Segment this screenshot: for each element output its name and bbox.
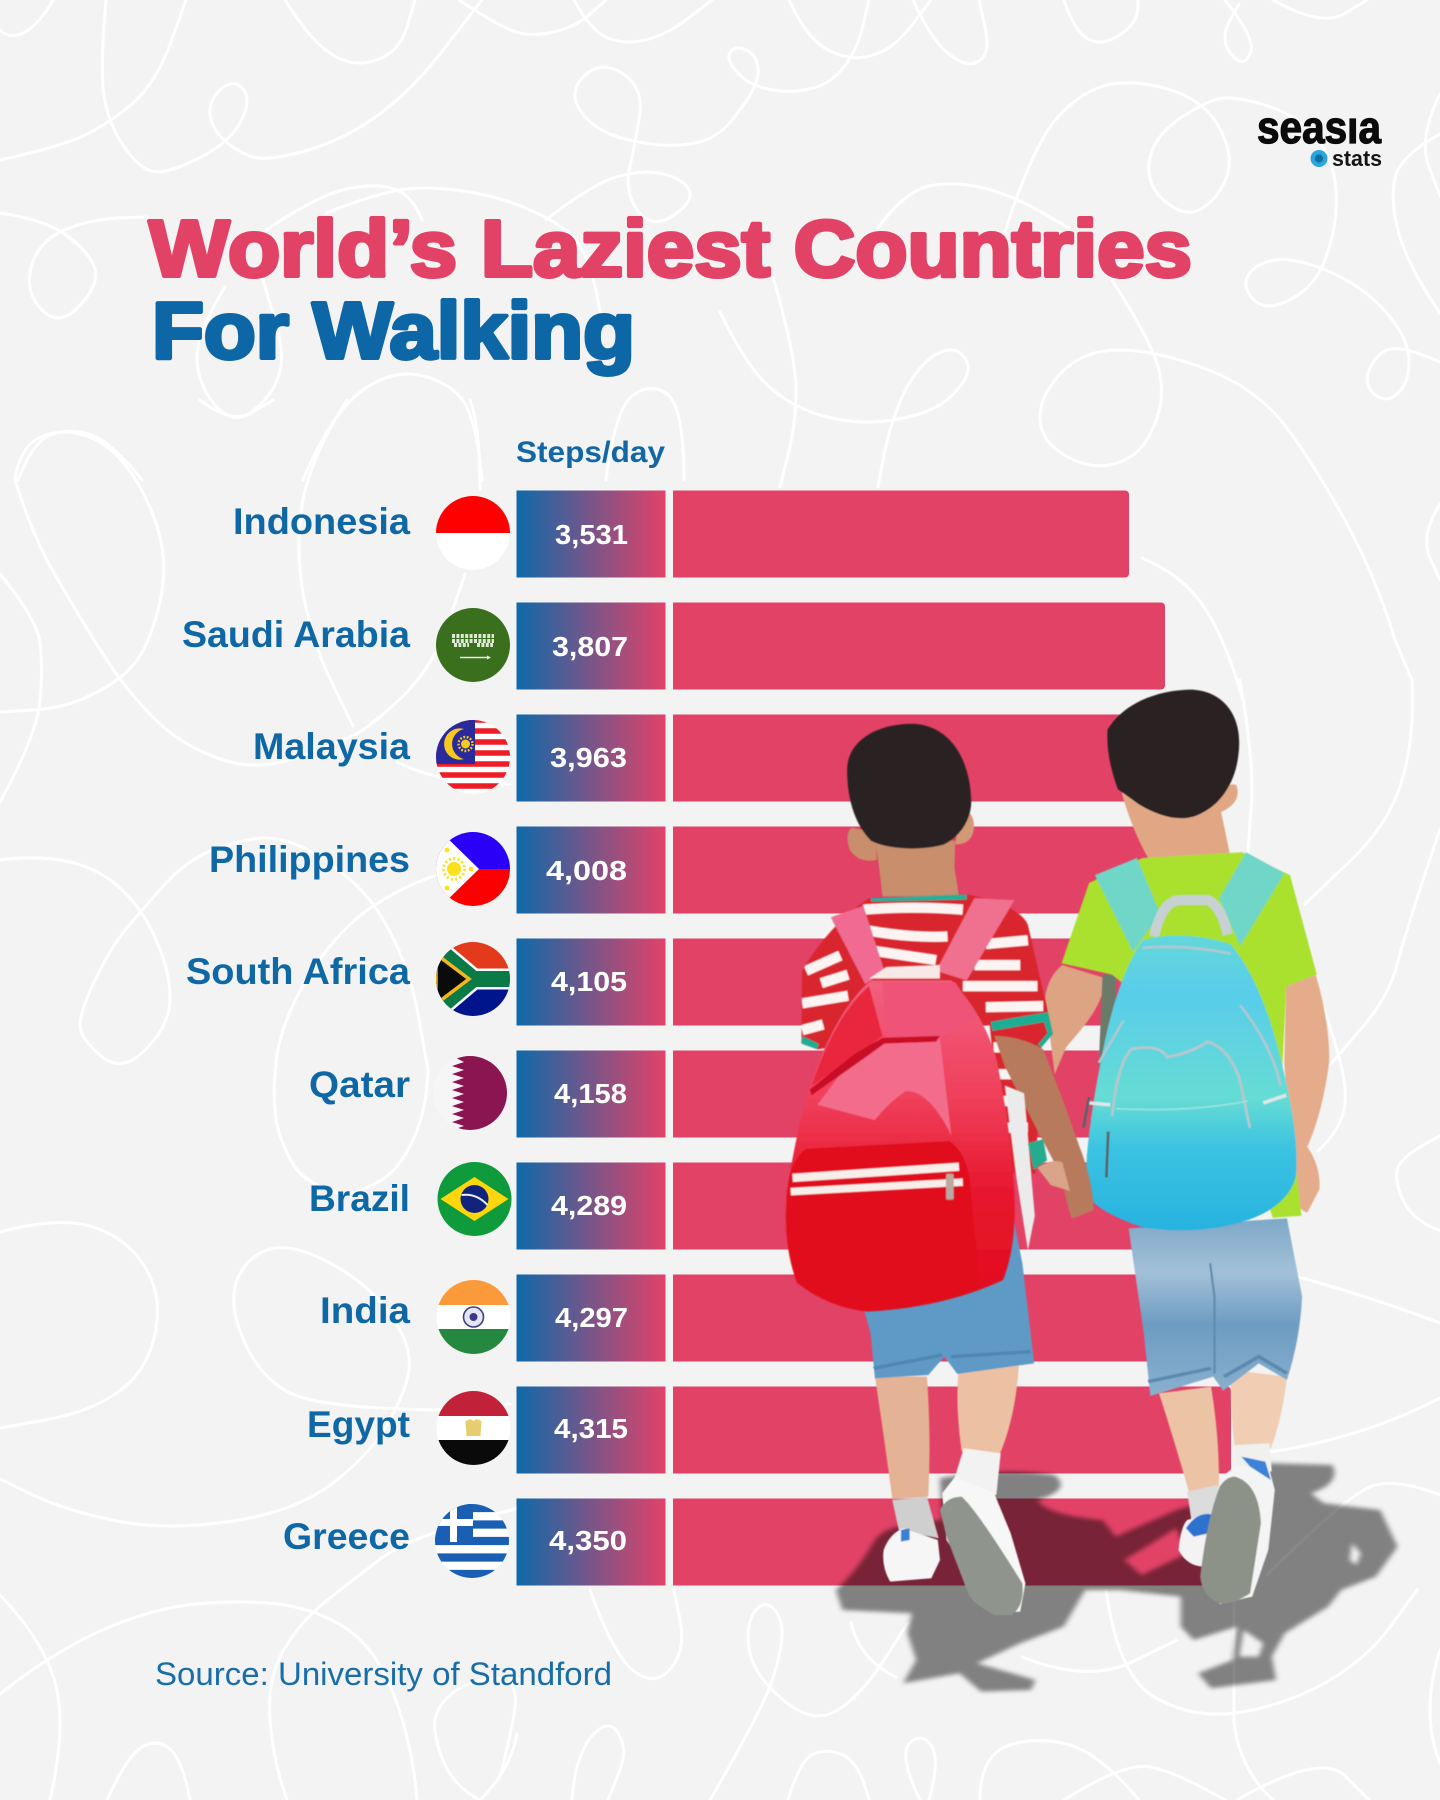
row: Greece [283,1498,1235,1586]
legs [875,1377,930,1499]
handle [1154,900,1228,936]
red backpack body [786,980,1015,1311]
logo: seasia stats: seasia [1257,102,1382,153]
ears [847,827,877,861]
bar [673,938,1201,1026]
left boy arm [994,1036,1094,1219]
flag: Saudi Arabia [436,608,510,682]
row: India [320,1274,1228,1362]
underside shadow by the backpack [1099,975,1116,1067]
left boy upper body [786,724,1094,1311]
value box [516,1386,666,1474]
country label: Philippines [209,839,410,880]
lime shirt [1062,852,1317,1218]
neck and ear [1122,784,1238,862]
shadow [836,1463,1398,1692]
value box [516,490,666,578]
source note: Source: University of Standford [155,1656,612,1692]
country label: Egypt [307,1404,410,1445]
red backpack straps [831,906,884,984]
value: 4,297 [555,1302,628,1333]
value box [516,826,666,914]
country label: India [320,1290,410,1331]
value box [516,1162,666,1250]
row: Qatar [310,1050,1100,1138]
flag: Brazil [438,1162,512,1236]
right boy upper body [1045,690,1329,1230]
right arm [1284,975,1329,1213]
left arm [1045,965,1106,1074]
white strap [1005,1086,1035,1250]
red side lobe [812,986,882,1086]
flag: Indonesia [436,496,510,570]
bar [673,1386,1231,1474]
value: 4,008 [546,855,627,886]
socks and shoes [1187,1485,1221,1522]
row: South Africa [186,938,1201,1026]
value box [516,1050,666,1138]
hair [1107,690,1239,818]
left boy lower body [864,1220,1034,1615]
value box [516,938,666,1026]
country label: Greece [283,1516,410,1557]
flag: Malaysia [436,720,510,794]
row: Philippines [209,826,1191,914]
bar [673,1050,1205,1138]
logo: seasia stats: stats [1332,146,1382,171]
country label: South Africa [186,951,410,992]
row: Brazil [309,1162,1222,1250]
value: 4,350 [549,1525,627,1556]
pocket zipper [1112,1042,1250,1128]
jeans [864,1220,1034,1378]
value box [516,1498,666,1586]
bar [673,714,1185,802]
country label: Indonesia [233,501,410,542]
blue backpack straps [1095,858,1160,952]
title: For Walking [152,286,635,375]
country label: Qatar [309,1064,410,1105]
striped shirt [798,890,1059,1181]
hair [847,724,971,848]
country label: Saudi Arabia [182,614,410,655]
blue backpack [1085,935,1297,1230]
bar [673,602,1165,690]
flag: South Africa [436,942,510,1016]
country label: Malaysia [253,726,410,767]
legs [1159,1387,1219,1493]
bar [673,1162,1222,1250]
white stripes [793,1167,959,1178]
title [149,204,1192,375]
flag: Philippines [436,832,510,906]
row: Indonesia [233,490,1129,578]
bar [673,826,1191,914]
value: 4,105 [551,966,627,997]
bar [673,490,1129,578]
right boy lower body [1129,1218,1302,1604]
value: 4,315 [554,1413,628,1444]
jeans [1129,1218,1302,1396]
flag: India [436,1280,510,1354]
value: 3,531 [555,519,628,550]
bar [673,1498,1235,1586]
illustration: two children walking with backpacks [786,690,1398,1692]
title: World’s Laziest Countries [149,204,1192,293]
flag: Qatar [452,1056,507,1130]
column heading: steps per day: Steps/day [516,436,665,469]
flag: Greece [435,1504,509,1578]
neck [875,841,959,896]
hand [1037,1161,1070,1191]
value: 4,158 [554,1078,627,1109]
value box [516,1274,666,1362]
flag: Egypt [436,1391,510,1465]
value: 3,963 [550,742,627,773]
row: Malaysia [253,714,1185,802]
row: Egypt [307,1386,1231,1474]
value: 4,289 [551,1190,627,1221]
socks and shoes [892,1497,939,1538]
value: 3,807 [552,631,628,662]
value box [516,714,666,802]
value box [516,602,666,690]
pink flap [817,1038,951,1135]
bar [673,1274,1228,1362]
zipper pull [946,1174,954,1200]
row: Saudi Arabia [182,602,1165,690]
country label: Brazil [309,1178,410,1219]
front pocket [786,1141,980,1311]
logo: seasia stats [1258,118,1382,167]
